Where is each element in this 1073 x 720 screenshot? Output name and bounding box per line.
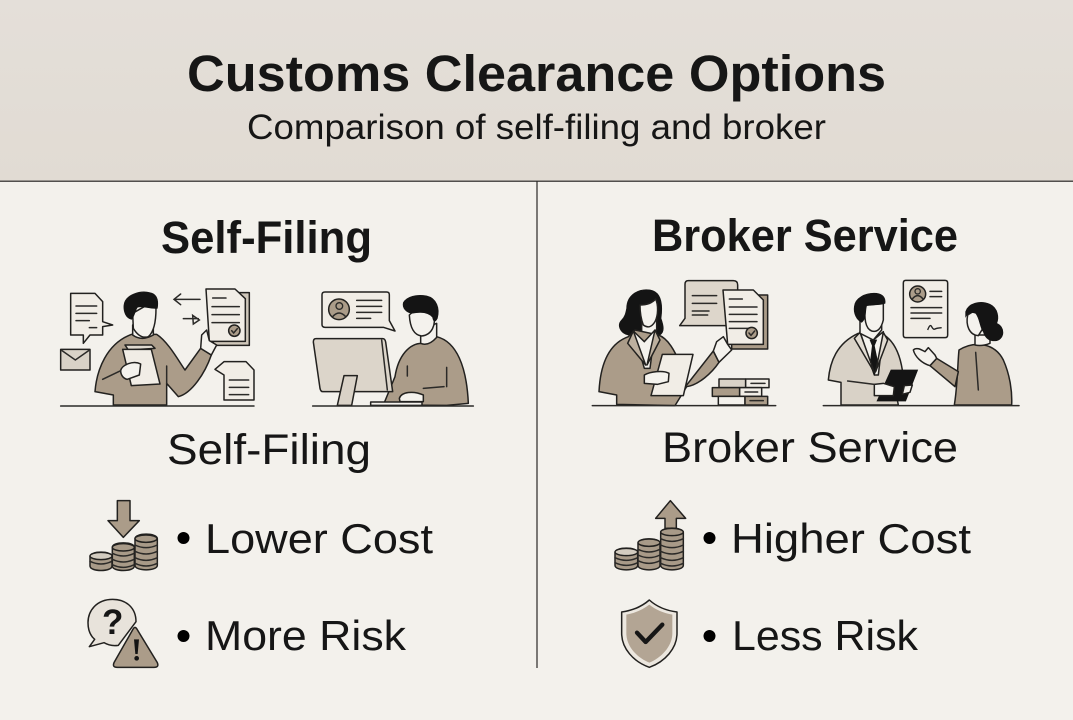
heading: broker service: Broker Service [652, 210, 958, 261]
subtitle: Comparison of self-filing and broker [247, 108, 826, 147]
icon: coins with up arrow [615, 501, 686, 570]
title: Customs Clearance Options [187, 45, 886, 102]
heading: self-filing: Self-Filing [161, 212, 372, 263]
bullet text: less risk: Less Risk [732, 612, 919, 659]
bullet text: lower cost: Lower Cost [205, 515, 433, 562]
icon: question and warning [88, 599, 158, 667]
illustration: person reviewing documents [61, 289, 254, 406]
panel: self-filing [61, 212, 473, 667]
icon: question and warning: ? [102, 603, 123, 642]
illustration: person at computer [313, 292, 473, 406]
bullet text: more risk: More Risk [205, 612, 407, 659]
icon: shield with check [622, 600, 677, 667]
label: self-filing: Self-Filing [167, 426, 371, 474]
label: broker service: Broker Service [662, 424, 958, 472]
illustration: woman with documents [592, 281, 776, 406]
panel: broker service [592, 210, 1019, 667]
icon: coins with down arrow [90, 501, 157, 570]
bullet text: higher cost: Higher Cost [731, 515, 971, 562]
header band [0, 0, 1073, 182]
illustration: broker and client [823, 280, 1019, 406]
